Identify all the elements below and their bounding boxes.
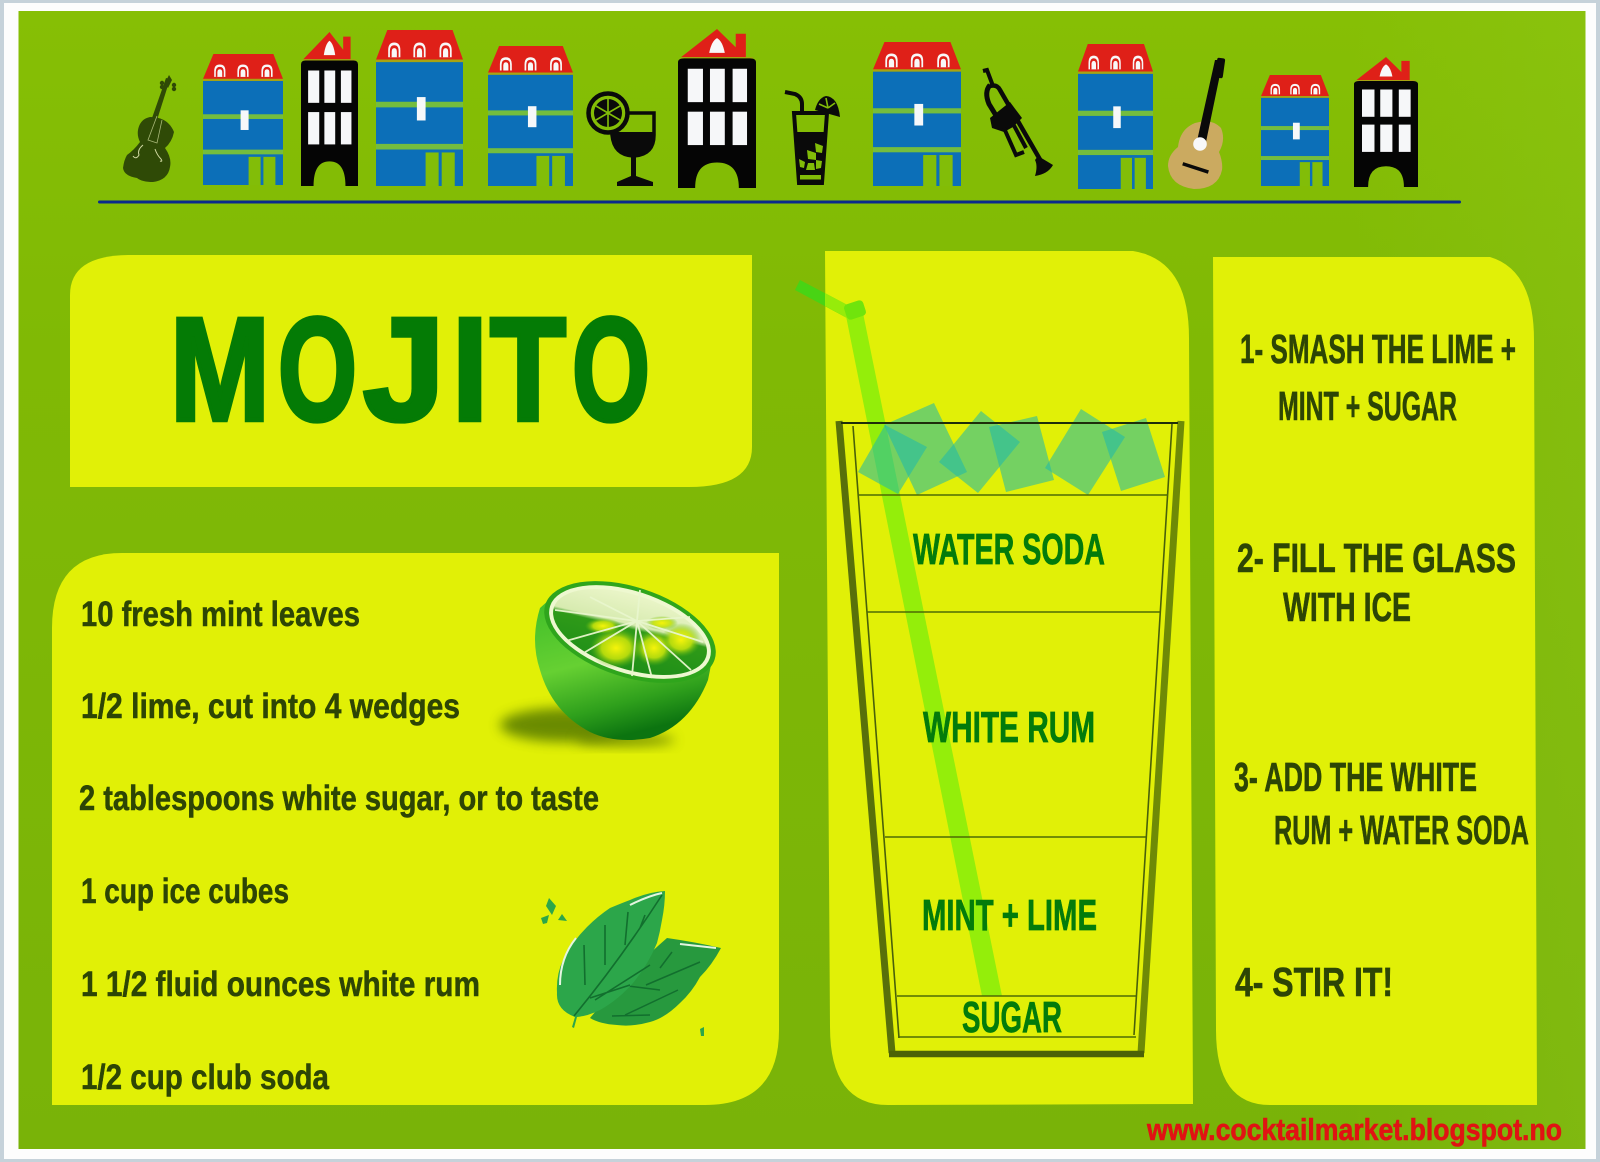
step 2 [1237, 535, 1516, 630]
icon: cocktail glass [785, 92, 840, 183]
panel: title [70, 255, 752, 487]
ingredients list: 2 tablespoons white sugar, or to taste [79, 779, 599, 818]
icon: mint leaves [541, 891, 721, 1036]
title: T [490, 288, 566, 452]
step 3: 3- ADD THE WHITE [1234, 754, 1477, 800]
town skyline [98, 29, 1461, 204]
layer labels: WATER SODA [913, 525, 1105, 574]
icon: lime [500, 562, 729, 746]
ingredients list: 1 1/2 fluid ounces white rum [81, 965, 480, 1004]
icon: wine glass with lime [588, 94, 654, 186]
drinking glass [839, 421, 1181, 1054]
panel: ingredients [52, 553, 779, 1105]
layer labels [913, 525, 1105, 1042]
building: blue 1 [203, 54, 283, 185]
title: I [452, 288, 488, 452]
ingredients list: 1/2 cup club soda [81, 1058, 329, 1097]
icon: violin [123, 75, 176, 182]
ice cubes [858, 403, 1165, 495]
step 1: MINT + SUGAR [1278, 383, 1457, 429]
straw [795, 280, 1002, 996]
ingredients list: 10 fresh mint leaves [81, 595, 360, 634]
step 4: 4- STIR IT! [1235, 959, 1393, 1005]
layer labels: SUGAR [962, 993, 1062, 1042]
panel: steps [1213, 257, 1537, 1105]
icon: guitar [1168, 58, 1225, 189]
layer labels: MINT + LIME [922, 891, 1097, 940]
building: black 2 [678, 29, 756, 188]
ground line [98, 200, 1461, 204]
step 1 [1240, 326, 1516, 429]
panel: glass [795, 251, 1193, 1105]
building: black 3 [1354, 57, 1418, 187]
building: black 1 [301, 32, 358, 186]
title: O [572, 288, 650, 452]
title: O [278, 288, 357, 452]
step 2: WITH ICE [1283, 584, 1411, 630]
title: J [363, 288, 445, 452]
building: blue 5 [1078, 44, 1153, 189]
title: M [170, 288, 270, 452]
ingredients list [79, 595, 599, 1097]
step 3 [1234, 754, 1529, 853]
building: blue 4 [873, 42, 961, 186]
ingredients list: 1 cup ice cubes [81, 872, 289, 911]
icon: trumpet [983, 70, 1053, 176]
building: blue 6 [1261, 75, 1329, 186]
building: blue 3 [488, 46, 573, 186]
building: blue 2 [376, 30, 463, 186]
layer labels: WHITE RUM [923, 703, 1095, 752]
ingredients list: 1/2 lime, cut into 4 wedges [81, 687, 460, 726]
